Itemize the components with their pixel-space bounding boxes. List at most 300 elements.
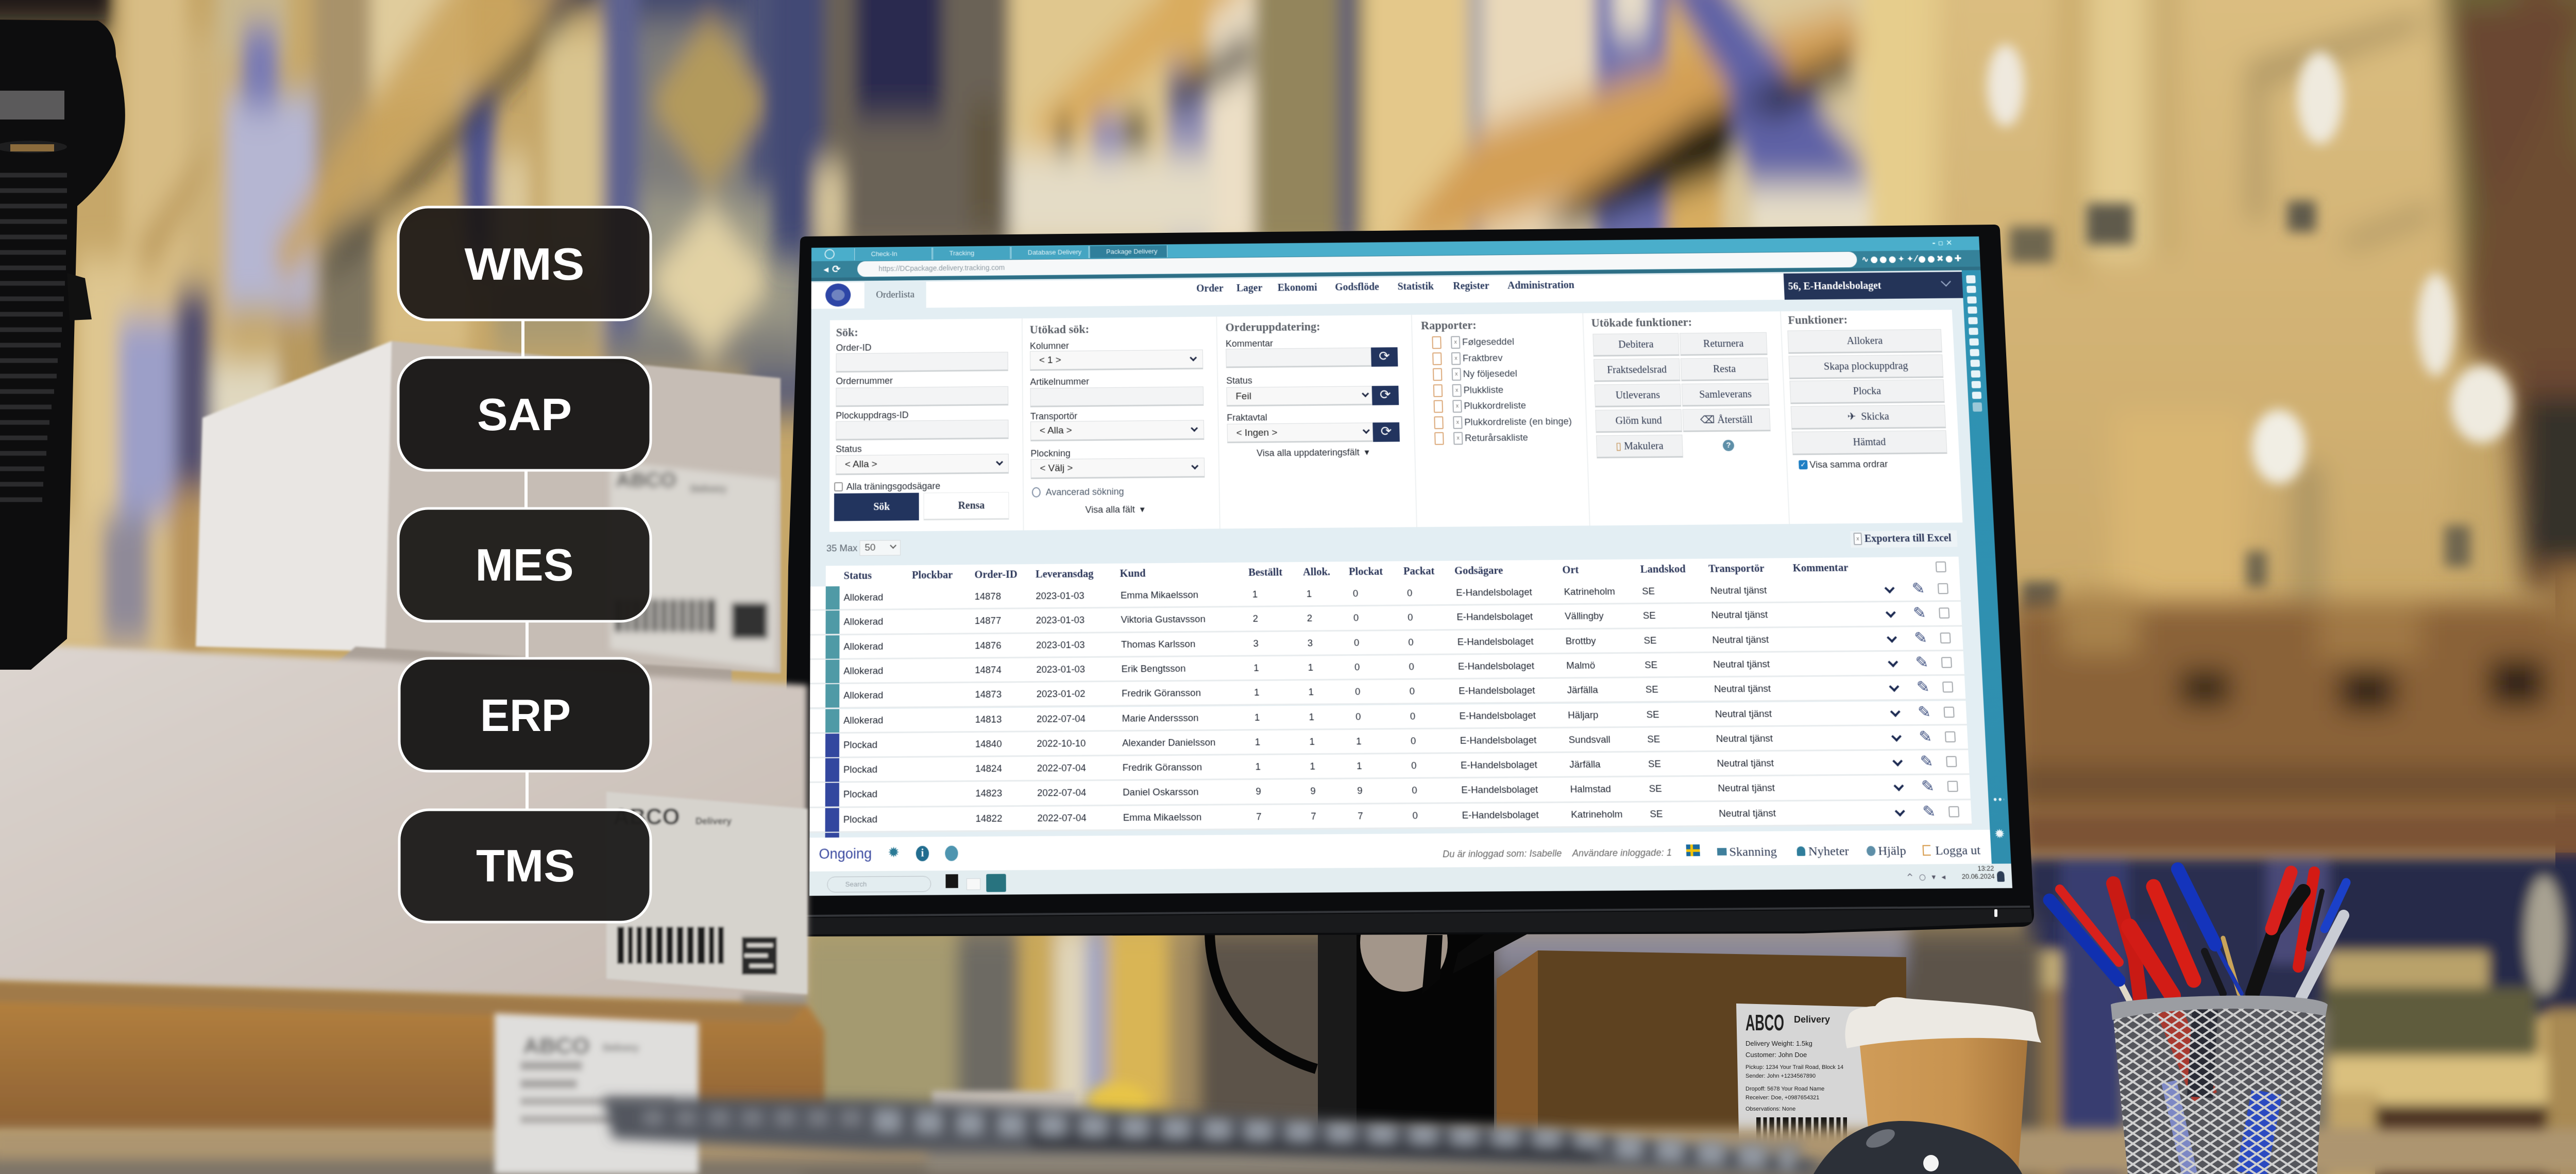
order row 14876: Thomas Karlsson (1121, 638, 1195, 650)
table header: Plockat (1349, 566, 1383, 577)
order row 14824 (810, 750, 1970, 783)
yellow reflection (1086, 1083, 1150, 1122)
order row 14876: 0 (1408, 636, 1414, 648)
node: WMS: WMS (465, 239, 584, 290)
panel: order update: Visa alla uppdateringsfält ▾ (1257, 447, 1369, 458)
panel: reports: Returårsakliste (1465, 432, 1528, 443)
monitor screen: WMS order list application (809, 236, 2012, 896)
order row 14878: 2023-01-03 (1036, 590, 1084, 601)
panel: functions: Visa samma ordrar (1809, 459, 1888, 470)
tab: Orderlista: Orderlista (876, 290, 914, 300)
computer mouse (1814, 1121, 2022, 1174)
info icon: i (921, 847, 924, 859)
menu: Ekonomi (1278, 282, 1317, 294)
order row 14824: E-Handelsbolaget (1461, 759, 1537, 771)
order row 14823: SE (1649, 783, 1662, 794)
order row 14822: 7 (1358, 810, 1363, 821)
browser tab bar (811, 236, 1979, 261)
order row 14873: ✎ (1916, 678, 1930, 696)
order row 14874: 0 (1354, 661, 1360, 672)
order row 14822: Neutral tjänst (1719, 807, 1776, 819)
order row 14874: 1 (1253, 662, 1259, 673)
lower carton label: ABCO (613, 804, 680, 829)
order row 14873: 0 (1355, 686, 1361, 697)
panel: extended search: Plockning (1030, 448, 1071, 458)
panel: extended functions: Resta (1713, 363, 1736, 375)
order row 14823: Halmstad (1570, 784, 1611, 795)
order row 14840: 1 (1309, 736, 1315, 747)
node: MES (398, 508, 651, 621)
carton shipping label: Sender: John +1234567890 (1745, 1073, 1816, 1079)
tab: Check-In: Check-In (871, 250, 897, 258)
page size selector (826, 540, 901, 556)
brown carton, lower left (0, 981, 824, 1133)
order row 14840: Alexander Danielsson (1122, 737, 1215, 748)
monitor stand (1210, 894, 1535, 1133)
panel: extended functions: Debitera (1618, 339, 1654, 350)
order row 14878: Allokerad (844, 591, 883, 603)
order row 14822: 7 (1311, 810, 1316, 822)
link: Nyheter (1797, 844, 1849, 859)
windows taskbar (809, 863, 2012, 896)
order row 14813: 1 (1255, 711, 1260, 723)
panel: reports: Ny följesedel (1463, 368, 1517, 379)
blurred warehouse racks, left (0, 0, 814, 721)
table header (826, 557, 1959, 586)
panel: search: Alla träningsgodsägare (846, 481, 940, 492)
order row 14878: ✎ (1911, 580, 1925, 598)
excel icon: x (1856, 536, 1859, 542)
order row 14813: Häljarp (1568, 709, 1599, 720)
panel: reports: Følgeseddel (1462, 336, 1514, 347)
order row 14822: ✎ (1922, 803, 1936, 821)
bottom status bar (809, 830, 1992, 872)
clock: 20.06.2024 (1962, 873, 1995, 880)
order row 14813: Neutral tjänst (1715, 708, 1772, 719)
carton shipping label: Dropoff: 5678 Your Road Name (1745, 1086, 1824, 1092)
order row 14840: SE (1647, 734, 1660, 744)
order row 14877: 2023-01-03 (1036, 615, 1084, 626)
monitor bezel (783, 225, 2034, 937)
panel: extended search: < Alla > (1040, 425, 1072, 436)
menu: Lager (1236, 282, 1263, 294)
panel: search: < Alla > (845, 459, 877, 470)
gear icon: ✹ (888, 844, 900, 861)
carton shipping label: No.12345678912 (1767, 1147, 1826, 1156)
address bar (811, 250, 1980, 281)
order row 14877: 0 (1353, 612, 1359, 623)
table header: Plockbar (912, 569, 953, 581)
order row 14873: 1 (1254, 687, 1260, 698)
panel: functions: ✓ (1800, 461, 1806, 469)
order row 14874: Allokerad (843, 665, 883, 676)
button: Rensa: Rensa (958, 500, 985, 512)
order row 14823: 2022-07-04 (1037, 787, 1086, 798)
order row 14878: Neutral tjänst (1710, 585, 1767, 596)
carton shipping label: Receiver: Doe, +0987654321 (1745, 1095, 1819, 1101)
brown carton behind keyboard (1497, 950, 1906, 1133)
barcode scanner head (0, 20, 125, 670)
order row 14878: Katrineholm (1564, 586, 1615, 597)
panel: order update: ⟳ (1379, 349, 1390, 364)
panel: extended functions: Fraktsedelsrad (1607, 364, 1667, 376)
order row 14813: 0 (1410, 710, 1415, 721)
order row 14824: 1 (1255, 761, 1261, 772)
table header: Packat (1403, 566, 1435, 577)
node: ERP: ERP (480, 690, 571, 741)
menu (1196, 280, 1574, 294)
logo mark (825, 283, 851, 307)
panel: search: Status (836, 444, 862, 454)
node: ERP (399, 658, 651, 771)
panel: extended search: Transportör (1030, 411, 1077, 421)
carton shipping label: ABCO (1745, 1010, 1784, 1035)
bottom status bar: Nyheter (1808, 844, 1849, 859)
order row 14878: SE (1642, 586, 1655, 597)
panel: search (829, 318, 1024, 532)
menu: Godsflöde (1335, 281, 1379, 293)
customer selector (1784, 272, 1963, 300)
order row 14877: Neutral tjänst (1711, 609, 1768, 620)
blurred stacked cartons, right (1937, 0, 2576, 670)
order row 14874: ✎ (1915, 653, 1929, 672)
panel: extended search: < 1 > (1039, 355, 1061, 366)
order row 14874: SE (1645, 659, 1657, 670)
carton shipping label: Customer: John Doe (1745, 1051, 1807, 1059)
order row 14873: 2023-01-02 (1037, 688, 1086, 700)
tab: Package Delivery: Package Delivery (1106, 247, 1158, 256)
tab: Database Delivery: Database Delivery (1028, 248, 1081, 256)
browser logo (824, 249, 835, 259)
toolbar icons (1966, 275, 1982, 412)
order row 14877: 0 (1408, 612, 1413, 623)
order row 14823: 9 (1310, 786, 1316, 796)
order row 14877: 14877 (975, 615, 1001, 626)
order row 14813: Marie Anderssson (1122, 712, 1199, 723)
upper carton label: ABCO (616, 469, 676, 491)
url field: https://DCpackage.delivery.tracking.com (878, 263, 1005, 273)
taskbar apps (945, 874, 1006, 892)
panel: reports: Fraktbrev (1463, 352, 1503, 363)
keyboard (603, 1097, 1819, 1174)
search box: Search (845, 880, 867, 888)
table header: Landskod (1640, 564, 1686, 575)
customer selector: 56, E-Handelsbolaget (1788, 280, 1882, 292)
order row 14823: E-Handelsbolaget (1461, 784, 1538, 795)
panel: extended functions: ⌫ Återställ (1700, 414, 1753, 426)
order row 14873: 14873 (975, 689, 1002, 700)
link: Logga ut (1922, 844, 1981, 858)
order row 14822: SE (1650, 808, 1663, 819)
panel: search: Plockuppdrags-ID (836, 410, 909, 421)
url field (857, 252, 1857, 277)
panel: functions: ✈ Skicka (1847, 411, 1889, 422)
brand: Ongoing: Ongoing (819, 846, 872, 862)
panel: order update: Feil (1235, 391, 1251, 402)
panel: extended search: Artikelnummer (1030, 377, 1089, 387)
panel: reports: Plukkordreliste (1464, 400, 1526, 411)
brown carton label: ABCO (523, 1033, 590, 1059)
order row 14822: 7 (1256, 811, 1262, 822)
order table (809, 556, 1972, 838)
order row 14823: Neutral tjänst (1718, 782, 1775, 794)
order row 14840: 14840 (975, 738, 1002, 749)
clock: 13:22 (1977, 865, 1994, 872)
extension icons: ∿●●●✦✦⁄●●✖●✚ (1861, 253, 1963, 265)
panel: reports: x (1455, 371, 1458, 377)
order row 14874: 2023-01-03 (1036, 663, 1085, 675)
panel: extended search: Kolumner (1030, 341, 1069, 351)
tab: Tracking (933, 247, 1010, 260)
table header: Beställt (1248, 567, 1282, 579)
panel: extended functions (1583, 311, 1790, 525)
export to Excel button: Exportera till Excel (1864, 533, 1952, 545)
order row 14877: SE (1643, 610, 1656, 621)
order row 14874: 1 (1308, 662, 1313, 673)
order row 14840: 0 (1411, 735, 1416, 746)
order row 14877: Vällingby (1565, 610, 1604, 622)
panel: functions: Allokera (1846, 335, 1883, 347)
order row 14824: Fredrik Göransson (1123, 761, 1202, 773)
panel: reports: x (1456, 403, 1459, 409)
right toolbar (1962, 270, 2011, 864)
order row 14813: ✎ (1917, 703, 1931, 721)
order row 14840 (810, 725, 1968, 758)
blurred background under monitor (804, 922, 2040, 1174)
order row 14824: 1 (1357, 760, 1362, 771)
globe icon (945, 846, 958, 861)
order row 14876: ✎ (1914, 629, 1928, 647)
lower carton label: Delivery (696, 816, 732, 826)
order row 14876: 14876 (975, 640, 1002, 651)
carton shipping label: Delivery (1794, 1014, 1830, 1025)
order row 14873 (810, 676, 1965, 709)
panel: extended functions: Samleverans (1699, 388, 1752, 400)
order row 14873: E-Handelsbolaget (1459, 685, 1535, 696)
blurred warehouse racks, top centre (773, 0, 2009, 268)
node: TMS (399, 810, 651, 922)
table header: Ort (1562, 565, 1579, 576)
order row 14824: 1 (1310, 761, 1315, 772)
order row 14877: ✎ (1912, 604, 1926, 622)
panel: functions (1787, 313, 1947, 470)
panel: order update: Orderuppdatering: (1225, 320, 1320, 334)
panel: extended functions: Utökade funktioner: (1591, 316, 1692, 329)
carton shipping label (1736, 1003, 1875, 1164)
order row 14824: Järfälla (1569, 759, 1601, 770)
notifications bell (1997, 871, 2005, 882)
panel: search: Ordernummer (836, 376, 893, 386)
menu: Order (1196, 283, 1224, 294)
carton shipping label: Observations: None (1745, 1106, 1795, 1112)
panel: search: Sök: (836, 326, 858, 339)
panel: extended functions: Glöm kund (1615, 415, 1662, 427)
order row 14813: 1 (1309, 711, 1314, 722)
panel: reports: x (1454, 339, 1457, 345)
button: Sök (834, 493, 919, 521)
bottom status bar: Logga ut (1935, 844, 1981, 858)
link: Skanning (1717, 845, 1777, 859)
clock (1962, 865, 1995, 880)
wire mesh pen holder (2111, 996, 2328, 1174)
logged-in text: Du är inloggad som: Isabelle (1443, 848, 1562, 859)
order row 14822 (809, 800, 1972, 833)
panel: order update: < Ingen > (1236, 428, 1278, 438)
table header: Kommentar (1792, 562, 1849, 574)
table header: Status (844, 570, 872, 582)
panel: extended search: Visa alla fält ▾ (1085, 504, 1145, 515)
order row 14873: Järfälla (1567, 684, 1598, 695)
order row 14874: 14874 (975, 664, 1002, 675)
window controls: - ▫ ✕ (1932, 238, 1953, 247)
carton shipping label: Pickup: 1234 Your Trail Road, Block 14 (1745, 1064, 1843, 1070)
selector chevron (1941, 277, 1951, 286)
order row 14874: Malmö (1566, 659, 1595, 671)
order row 14876: 2023-01-03 (1036, 639, 1085, 650)
order row 14824: 14824 (975, 763, 1002, 774)
order row 14878: 1 (1307, 588, 1312, 599)
table header: Transportör (1708, 563, 1765, 575)
partial next row (825, 833, 839, 838)
panel: order update: Status (1226, 376, 1252, 386)
order row 14876: Brottby (1565, 635, 1596, 646)
bottom status bar: Skanning (1729, 845, 1777, 859)
order row 14878: Emma Mikaelsson (1121, 589, 1198, 601)
tab: Orderlista (865, 282, 926, 309)
order row 14840: Neutral tjänst (1716, 733, 1773, 744)
menu: Administration (1507, 280, 1574, 291)
order row 14813: SE (1646, 708, 1659, 720)
node: MES: MES (475, 539, 574, 590)
panel: reports: x (1454, 355, 1458, 362)
panel: reports: Plukkliste (1463, 384, 1503, 395)
brown carton label (495, 1013, 699, 1174)
tab: Check-In (854, 248, 932, 260)
panel: reports: Plukkordreliste (en binge) (1464, 416, 1572, 428)
order row 14823: 14823 (975, 788, 1002, 799)
order row 14840: E-Handelsbolaget (1460, 734, 1537, 746)
order row 14876: SE (1643, 635, 1657, 645)
node: SAP (398, 358, 651, 470)
lower carton label (606, 792, 807, 994)
order row 14822: Plockad (843, 813, 877, 825)
order row 14823: ✎ (1921, 777, 1935, 796)
carton shipping label: Delivery Weight: 1.5kg (1745, 1040, 1812, 1047)
order row 14813: 0 (1355, 711, 1361, 722)
order row 14873: Neutral tjänst (1714, 683, 1771, 694)
order row 14840: ✎ (1919, 728, 1933, 746)
brown carton label: Delivery (603, 1043, 639, 1053)
panel: order update: Fraktavtal (1227, 412, 1267, 423)
page size selector: 35 Max (826, 542, 857, 553)
panel: order update: Kommentar (1226, 338, 1273, 349)
bottom status bar: Hjälp (1878, 844, 1906, 858)
order row 14823: Daniel Oskarsson (1123, 786, 1199, 798)
tab: Tracking: Tracking (950, 249, 974, 257)
search and functions panel (829, 310, 1962, 532)
order row 14874: Erik Bengtsson (1121, 662, 1185, 674)
upper carton label (610, 461, 778, 670)
table header: Allok. (1303, 566, 1330, 578)
order row 14824: 0 (1411, 760, 1417, 771)
order row 14813: E-Handelsbolaget (1459, 709, 1536, 721)
order row 14877: 2 (1307, 612, 1312, 624)
order row 14877: Allokerad (843, 616, 883, 627)
upper carton label: Delivery (690, 484, 726, 494)
order row 14876: 3 (1253, 638, 1259, 649)
panel: order update (1217, 315, 1417, 529)
button: Sök: Sök (873, 501, 890, 513)
order row 14873: Allokerad (843, 690, 883, 701)
order row 14823: Plockad (843, 789, 877, 800)
table header: Order-ID (974, 569, 1018, 581)
order row 14876: Allokerad (843, 640, 883, 652)
panel: search: Order-ID (836, 343, 872, 353)
pens in holder (2049, 869, 2346, 1000)
order row 14824: 2022-07-04 (1037, 762, 1086, 774)
blurred pallets and lower shelves, right (2009, 567, 2576, 829)
order row 14813 (810, 701, 1967, 734)
order row 14873: SE (1646, 684, 1658, 695)
order row 14877 (810, 602, 1962, 635)
order row 14840: Plockad (843, 739, 877, 750)
lower white carton (0, 643, 807, 1012)
order row 14873: 1 (1308, 686, 1314, 697)
table surface (0, 1128, 2576, 1174)
page size selector: 50 (865, 542, 875, 553)
node: SAP: SAP (477, 389, 572, 440)
table header: Kund (1120, 568, 1146, 580)
order row 14873: 0 (1409, 686, 1415, 696)
menu: Register (1453, 280, 1489, 292)
Swedish flag (1686, 844, 1700, 856)
order row 14822: 0 (1412, 810, 1418, 821)
order row 14824: SE (1648, 758, 1661, 769)
panel: reports: x (1455, 387, 1459, 394)
order row 14877: E-Handelsbolaget (1456, 611, 1533, 622)
table header: Leveransdag (1036, 568, 1094, 580)
order row 14823: 9 (1357, 785, 1363, 796)
order row 14823 (810, 775, 1971, 808)
order row 14878: 14878 (975, 591, 1001, 602)
order row 14873: Fredrik Göransson (1122, 687, 1201, 699)
tab: Package Delivery (1089, 245, 1167, 258)
order row 14878 (810, 577, 1961, 611)
blurred carton labels (1987, 44, 2513, 613)
order row 14822: Emma Mikaelsson (1123, 811, 1201, 823)
order row 14878: E-Handelsbolaget (1456, 586, 1532, 598)
upper white carton (196, 341, 781, 688)
export to Excel button (1850, 530, 1958, 548)
tray icons: ^○▾◂ (1906, 872, 1952, 882)
panel: extended search: < Välj > (1040, 463, 1073, 474)
table header: Godsägare (1454, 565, 1503, 577)
order row 14877: 2 (1252, 613, 1258, 624)
order row 14824: Plockad (843, 764, 877, 775)
button: Rensa (924, 492, 1009, 520)
top navigation (811, 272, 1963, 309)
order row 14824: ✎ (1920, 753, 1934, 771)
panel: order update: ⟳ (1380, 387, 1391, 403)
order row 14822: 2022-07-04 (1037, 812, 1087, 823)
order row 14878: 0 (1407, 587, 1413, 598)
order row 14876: Neutral tjänst (1712, 634, 1769, 645)
panel: extended search: Avancerad sökning (1046, 486, 1124, 497)
order row 14822: 14822 (975, 812, 1002, 824)
search box (827, 876, 931, 893)
order row 14876: 0 (1354, 637, 1360, 648)
panel: functions: Skapa plockuppdrag (1824, 360, 1908, 372)
